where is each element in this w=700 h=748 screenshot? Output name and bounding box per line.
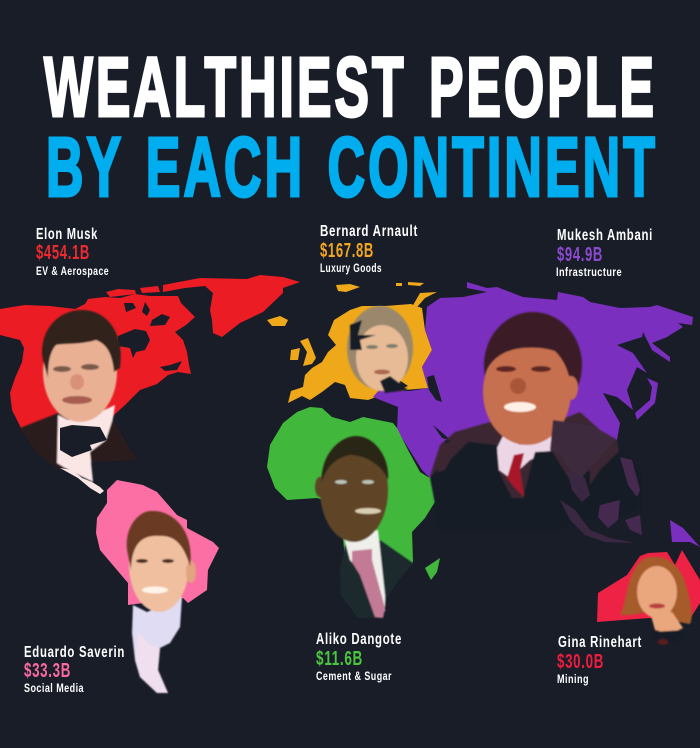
- label: Aliko Dangote: Cement & Sugar: [316, 669, 392, 683]
- Hudson Bay: [118, 329, 150, 358]
- label: Eduardo Saverin: Eduardo Saverin: [24, 644, 125, 661]
- continent: South America: [96, 480, 219, 605]
- continent: Africa: [267, 407, 443, 580]
- Southeast Asia islands: [560, 457, 700, 547]
- label: Gina Rinehart: [557, 634, 642, 686]
- portrait: Eduardo Saverin: [127, 511, 196, 693]
- label: Gina Rinehart: Gina Rinehart: [558, 634, 642, 651]
- Gulf of Mexico and Central America: [60, 425, 107, 494]
- label: Elon Musk: EV & Aerospace: [36, 264, 109, 278]
- label: Eduardo Saverin: Social Media: [24, 681, 84, 695]
- continent: Europe: [267, 282, 437, 403]
- label: Eduardo Saverin: $33.3B: [24, 660, 71, 682]
- portrait: Mukesh Ambani: [430, 312, 640, 530]
- portrait: Bernard Arnault: [347, 306, 413, 393]
- label: Bernard Arnault: Luxury Goods: [320, 261, 382, 275]
- world map: [0, 275, 700, 693]
- portrait: Aliko Dangote: [315, 436, 413, 618]
- label: Aliko Dangote: $11.6B: [316, 648, 363, 670]
- label: Bernard Arnault: $167.8B: [320, 240, 374, 262]
- continent: North America: [0, 275, 300, 445]
- label: Elon Musk: $454.1B: [36, 242, 90, 264]
- title: [44, 40, 658, 214]
- label: Gina Rinehart: $30.0B: [557, 651, 604, 673]
- continent: Asia: [373, 282, 693, 478]
- continent: Australia: [597, 550, 700, 622]
- label: Mukesh Ambani: $94.9B: [557, 244, 603, 266]
- portrait: Elon Musk: [20, 310, 137, 482]
- label: Elon Musk: [36, 226, 109, 278]
- label: Elon Musk: Elon Musk: [36, 226, 98, 243]
- label: Gina Rinehart: Mining: [557, 672, 589, 686]
- label: Mukesh Ambani: Infrastructure: [556, 265, 622, 279]
- label: Aliko Dangote: Aliko Dangote: [316, 631, 402, 648]
- label: Eduardo Saverin: [24, 644, 125, 695]
- label: Bernard Arnault: Bernard Arnault: [320, 223, 418, 240]
- label: Mukesh Ambani: [556, 227, 653, 279]
- label: Bernard Arnault: [320, 223, 418, 275]
- label: Mukesh Ambani: Mukesh Ambani: [557, 227, 653, 244]
- label: Aliko Dangote: [316, 631, 402, 683]
- portrait: Gina Rinehart: [620, 557, 692, 645]
